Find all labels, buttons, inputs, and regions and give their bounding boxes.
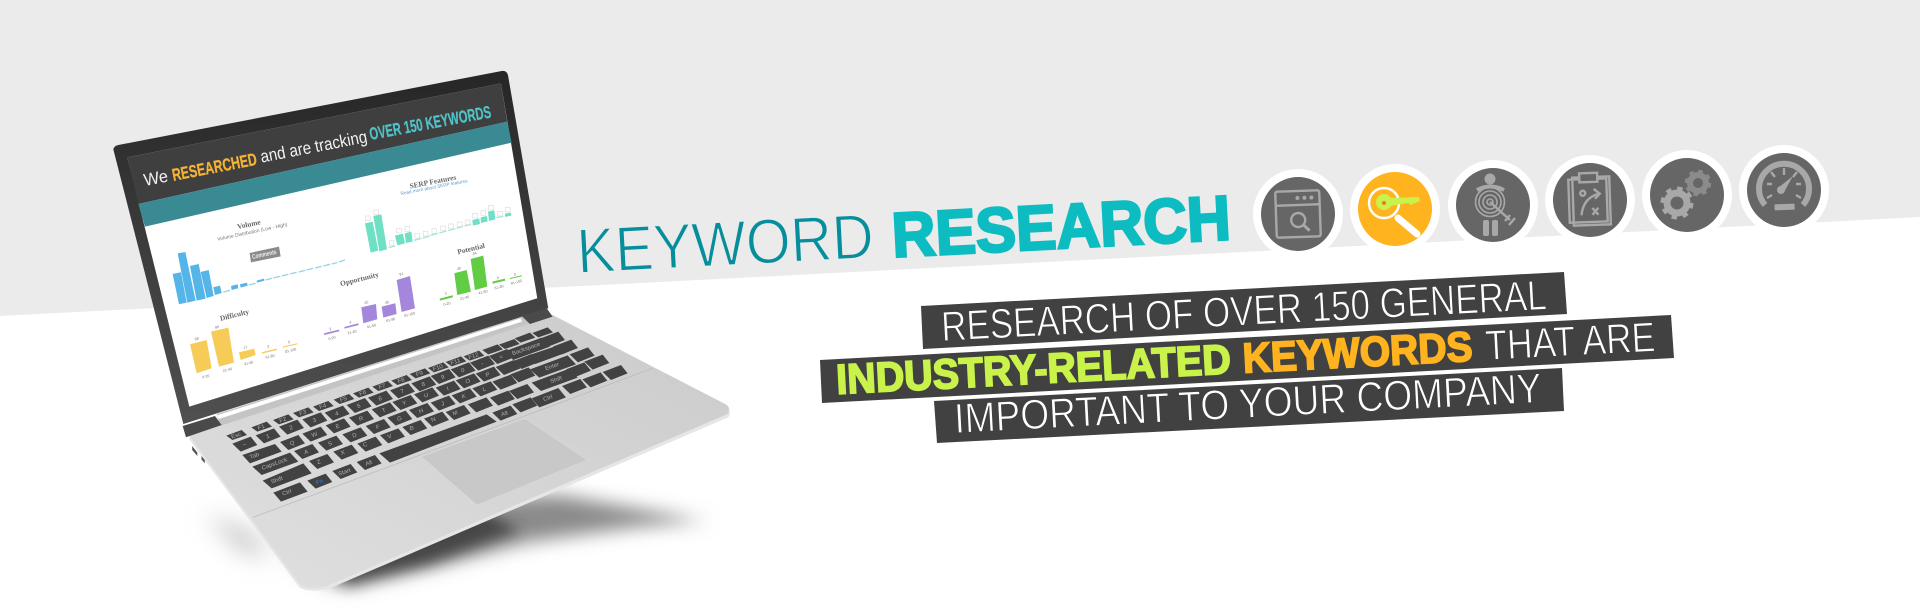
chart: opportunity: 61-80 (386, 317, 396, 323)
chart: opportunity: 45 (364, 300, 369, 305)
chart: SERP features: Read more about SERP features (400, 178, 469, 196)
keyboard keys: C (362, 442, 369, 449)
lid bezel (113, 71, 548, 424)
keyboard keys: T (381, 408, 387, 414)
keyboard keys (226, 327, 628, 502)
keyboard keys: 4 (335, 411, 340, 418)
keyboard keys: 0 (460, 367, 466, 374)
tagline line 2 bar (820, 315, 1674, 403)
chart: difficulty (190, 307, 298, 379)
keyboard keys: G (397, 416, 403, 423)
screen title: OVER 150 KEYWORDS (368, 102, 493, 144)
screen title: RESEARCHED (170, 149, 259, 185)
keyboard keys: Tab (249, 452, 261, 461)
keyboard keys: F12 (468, 352, 479, 361)
keyboard keys: Ctrl (282, 489, 292, 497)
tagline line 2 text: INDUSTRY-RELATED (835, 335, 1232, 403)
chart: potential: 3 (444, 291, 447, 296)
chart: potential: 81-100 (510, 279, 522, 286)
tagline line 3 bar (934, 368, 1564, 443)
chart: opportunity: 81-100 (404, 311, 416, 318)
keyboard keys: - (480, 361, 484, 368)
keyboard keys: F5 (339, 396, 349, 404)
chart: volume: Volume (236, 217, 262, 231)
keyboard keys: Shift (270, 476, 284, 486)
chart: opportunity: 26 (385, 300, 390, 305)
chart: difficulty: 81-100 (285, 347, 297, 354)
touchpad (421, 418, 587, 505)
keyboard keys: J (441, 401, 445, 408)
screen title (142, 102, 493, 190)
screen title: We (142, 166, 170, 190)
chart: potential: 5 (497, 276, 500, 280)
keyboard keys: E (335, 424, 341, 431)
chart: opportunity: 21-40 (347, 329, 357, 335)
chart: difficulty: 41-60 (244, 360, 254, 366)
chart: potential: 21-40 (460, 295, 470, 301)
chart: potential: Potential (456, 241, 486, 256)
chart: potential: 41-60 (478, 289, 488, 295)
hinges (183, 308, 553, 437)
tagline line 1 text: RESEARCH OF OVER 150 GENERAL (940, 271, 1548, 350)
chart: SERP features (365, 173, 511, 253)
chart: potential: 45 (457, 266, 462, 271)
keyboard keys: Start (338, 468, 352, 478)
chart: difficulty: 68 (194, 337, 199, 341)
keyboard keys: Enter (545, 362, 560, 372)
keyboard keys: 6 (378, 396, 383, 403)
keyboard keys: R (358, 416, 364, 423)
keyboard keys: 3 (312, 418, 317, 424)
tagline line 3 text: IMPORTANT TO YOUR COMPANY (953, 364, 1543, 442)
keyboard keys: B (409, 425, 415, 432)
keyboard keys: Alt (500, 410, 509, 418)
keyboard keys: F8 (397, 377, 406, 385)
chart: difficulty: 17 (243, 345, 248, 350)
keyboard keys: K (461, 394, 467, 401)
icon: gears (1642, 150, 1732, 240)
keyboard keys: 5 (357, 403, 362, 410)
chart: potential (440, 241, 522, 307)
keyboard keys: O (465, 378, 472, 386)
tagline line 1 bar (921, 272, 1567, 349)
keyboard keys: P (485, 372, 491, 379)
keyboard keys: 1 (266, 434, 271, 440)
heading: keyword research (575, 183, 1232, 287)
screen teal band (138, 122, 512, 227)
keyboard keys: Z (316, 459, 322, 466)
chart: volume: Volume Distribution (Low - High) (217, 222, 288, 243)
keyboard keys: F9 (415, 370, 424, 378)
tagline block (820, 271, 1674, 443)
heading: keyword research: KEYWORD (575, 202, 875, 287)
chart: potential: 84 (472, 251, 477, 256)
laptop base (188, 315, 730, 591)
keyboard keys: F3 (299, 409, 307, 417)
laptop lid and screen (113, 71, 553, 437)
keyboard keys: N (431, 417, 437, 424)
keyboard keys: Shift (550, 375, 563, 385)
keyboard keys: F1 (257, 424, 266, 432)
chart: opportunity: 4 (349, 320, 352, 325)
chart: volume: Comments (252, 249, 277, 261)
keyboard keys: Fn (315, 478, 324, 486)
keyboard keys: 9 (441, 374, 446, 381)
chart: potential: 61-80 (494, 284, 504, 290)
chart: difficulty: 0 (288, 340, 291, 345)
keyboard keys: W (311, 432, 319, 439)
keyboard keys: F7 (378, 383, 387, 391)
keyboard keys: F10 (432, 364, 445, 373)
chart: difficulty: Difficulty (219, 307, 250, 323)
keyboard keys: Alt (365, 460, 374, 468)
keyboard keys: F2 (279, 416, 287, 424)
keyboard keys: D (352, 433, 358, 440)
tagline line 2 text (835, 313, 1656, 403)
laptop shadow (205, 495, 705, 588)
keyboard keys: Esc (231, 432, 242, 441)
heading: keyword research: RESEARCH (890, 183, 1232, 271)
chart: SERP features: SERP Features (409, 173, 457, 190)
icon: website search (1253, 169, 1343, 259)
keyboard keys: Q (289, 440, 296, 447)
keyboard keys: ~ (242, 442, 248, 449)
chart: opportunity: 2 (329, 327, 332, 332)
icon: keyword magnifier (active) (1350, 164, 1440, 254)
chart: opportunity (324, 270, 416, 341)
tagline line 2 text: THAT ARE (1484, 313, 1656, 369)
keyboard keys: L (482, 386, 488, 393)
keyboard keys: Y (402, 400, 408, 407)
keyboard keys: 8 (421, 382, 426, 388)
chart: difficulty: 3 (267, 344, 270, 349)
chart: opportunity: 41-60 (366, 323, 376, 329)
chart: difficulty: 0-20 (202, 374, 210, 379)
chart: potential: 0 (514, 272, 517, 277)
icon: person target (1448, 160, 1538, 250)
keyboard keys: H (418, 408, 424, 415)
screen header band (127, 83, 507, 204)
keyboard keys: 7 (400, 389, 405, 395)
chart: potential: 0-20 (443, 301, 451, 307)
background: grey sloped band (0, 0, 1920, 316)
keyboard keys: = (499, 354, 504, 361)
icon: strategy clipboard (1545, 155, 1635, 245)
laptop illustration (113, 71, 730, 591)
keyboard keys: F11 (450, 358, 461, 367)
keyboard keys: Ctrl (543, 394, 553, 403)
tagline line 2 text: KEYWORDS (1241, 323, 1474, 382)
keyboard keys: F4 (319, 403, 328, 411)
icon: speedometer (1739, 145, 1829, 235)
side ports (192, 446, 205, 463)
keyboard keys: CapsLock (261, 457, 288, 472)
keyboard keys: U (423, 393, 429, 400)
keyboard keys: X (340, 450, 346, 457)
chart: volume (173, 217, 345, 304)
keyboard keys: F (375, 424, 381, 431)
screen (127, 83, 537, 407)
keyboard keys: I (446, 386, 450, 392)
keyboard keys: S (328, 441, 333, 448)
keyboard keys: V (387, 434, 393, 441)
keyboard keys: Backspace (512, 342, 541, 357)
chart: difficulty: 21-40 (222, 367, 232, 373)
keyboard keys: 2 (289, 425, 294, 432)
keyboard keys: F6 (359, 390, 367, 398)
chart: difficulty: 80 (215, 325, 220, 330)
chart: opportunity: 91 (399, 272, 404, 277)
keyboard keys: A (304, 449, 309, 456)
chart: difficulty: 61-80 (265, 354, 275, 360)
screen title: and are tracking (259, 126, 369, 167)
keyboard keys: M (452, 410, 459, 417)
chart: opportunity: 0-20 (328, 336, 336, 341)
chart: opportunity: Opportunity (339, 270, 380, 288)
